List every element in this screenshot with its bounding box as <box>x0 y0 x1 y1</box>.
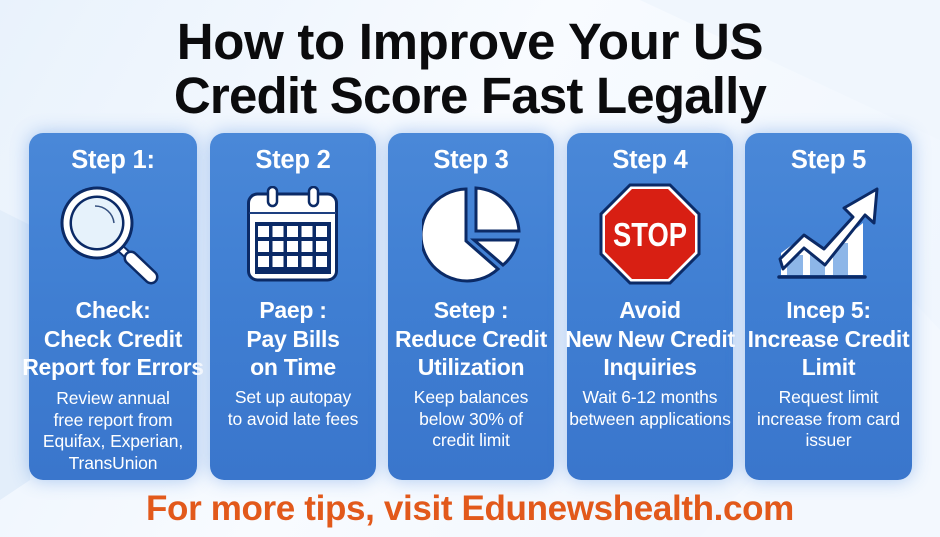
step 2 heading: on Time <box>250 354 336 380</box>
step 3 heading <box>395 297 547 380</box>
icon: magnifying glass <box>60 186 158 284</box>
step 5 label: Step 5 <box>791 146 866 174</box>
icon: pie chart <box>422 186 521 282</box>
step 1 description: Equifax, Experian, <box>43 431 183 451</box>
panel: step 5 <box>745 133 912 480</box>
icon: stop sign: STOP <box>613 216 687 253</box>
step 2 description: to avoid late fees <box>228 408 358 428</box>
step 1 description: Review annual <box>56 388 170 408</box>
title <box>174 13 767 124</box>
step 3 description: below 30% of <box>419 408 523 428</box>
step 5 description: issuer <box>805 430 852 450</box>
step 3 description: Keep balances <box>414 387 528 407</box>
step 2 label: Step 2 <box>255 146 331 174</box>
step 1 heading <box>22 297 204 380</box>
step 4 heading: New New Credit <box>565 326 735 352</box>
step 1 description: free report from <box>54 410 172 430</box>
panel: step 2 <box>210 133 376 480</box>
icon: calendar <box>247 186 338 282</box>
step 1 description: TransUnion <box>69 452 157 472</box>
step 1 heading: Check Credit <box>44 326 182 352</box>
step 4 description <box>569 387 731 428</box>
step 4 heading: Avoid <box>619 297 681 323</box>
title: How to Improve Your US <box>177 13 763 70</box>
step 1 heading: Report for Errors <box>22 354 204 380</box>
step 3 heading: Reduce Credit <box>395 326 547 352</box>
step 3 heading: Setep : <box>434 297 508 323</box>
step 3 label: Step 3 <box>433 146 509 174</box>
step 4 heading <box>565 297 735 380</box>
step 5 heading: Increase Credit <box>748 326 909 352</box>
step 1 description <box>43 388 183 472</box>
step 2 description <box>228 387 358 428</box>
panel: step 3 <box>388 133 554 480</box>
step 4 label: Step 4 <box>612 146 688 174</box>
panel: step 1 <box>29 133 197 480</box>
step 4 heading: Inquiries <box>603 354 697 380</box>
step 5 heading <box>748 297 910 380</box>
step 3 description: credit limit <box>432 430 510 450</box>
step 3 heading: Utilization <box>418 354 524 380</box>
step 1 heading: Check: <box>76 297 150 323</box>
step 2 heading: Paep : <box>259 297 327 323</box>
step 5 description <box>757 387 900 450</box>
step 4 description: between applications <box>569 408 731 428</box>
icon: rising chart <box>777 187 878 279</box>
step 5 description: increase from card <box>757 408 900 428</box>
step 2 heading <box>246 297 340 380</box>
step 4 description: Wait 6-12 months <box>583 387 717 407</box>
panel: step 4 <box>567 133 733 480</box>
step 5 heading: Limit <box>802 354 855 380</box>
step 1 label: Step 1: <box>71 146 155 174</box>
step 5 heading: Incep 5: <box>786 297 871 323</box>
icon: stop sign <box>600 184 700 284</box>
title: Credit Score Fast Legally <box>174 67 766 124</box>
step 3 description <box>414 387 528 450</box>
step 2 description: Set up autopay <box>235 387 351 407</box>
step 5 description: Request limit <box>779 387 878 407</box>
footer call to action: For more tips, visit Edunewshealth.com <box>146 489 794 528</box>
step 2 heading: Pay Bills <box>246 326 340 352</box>
